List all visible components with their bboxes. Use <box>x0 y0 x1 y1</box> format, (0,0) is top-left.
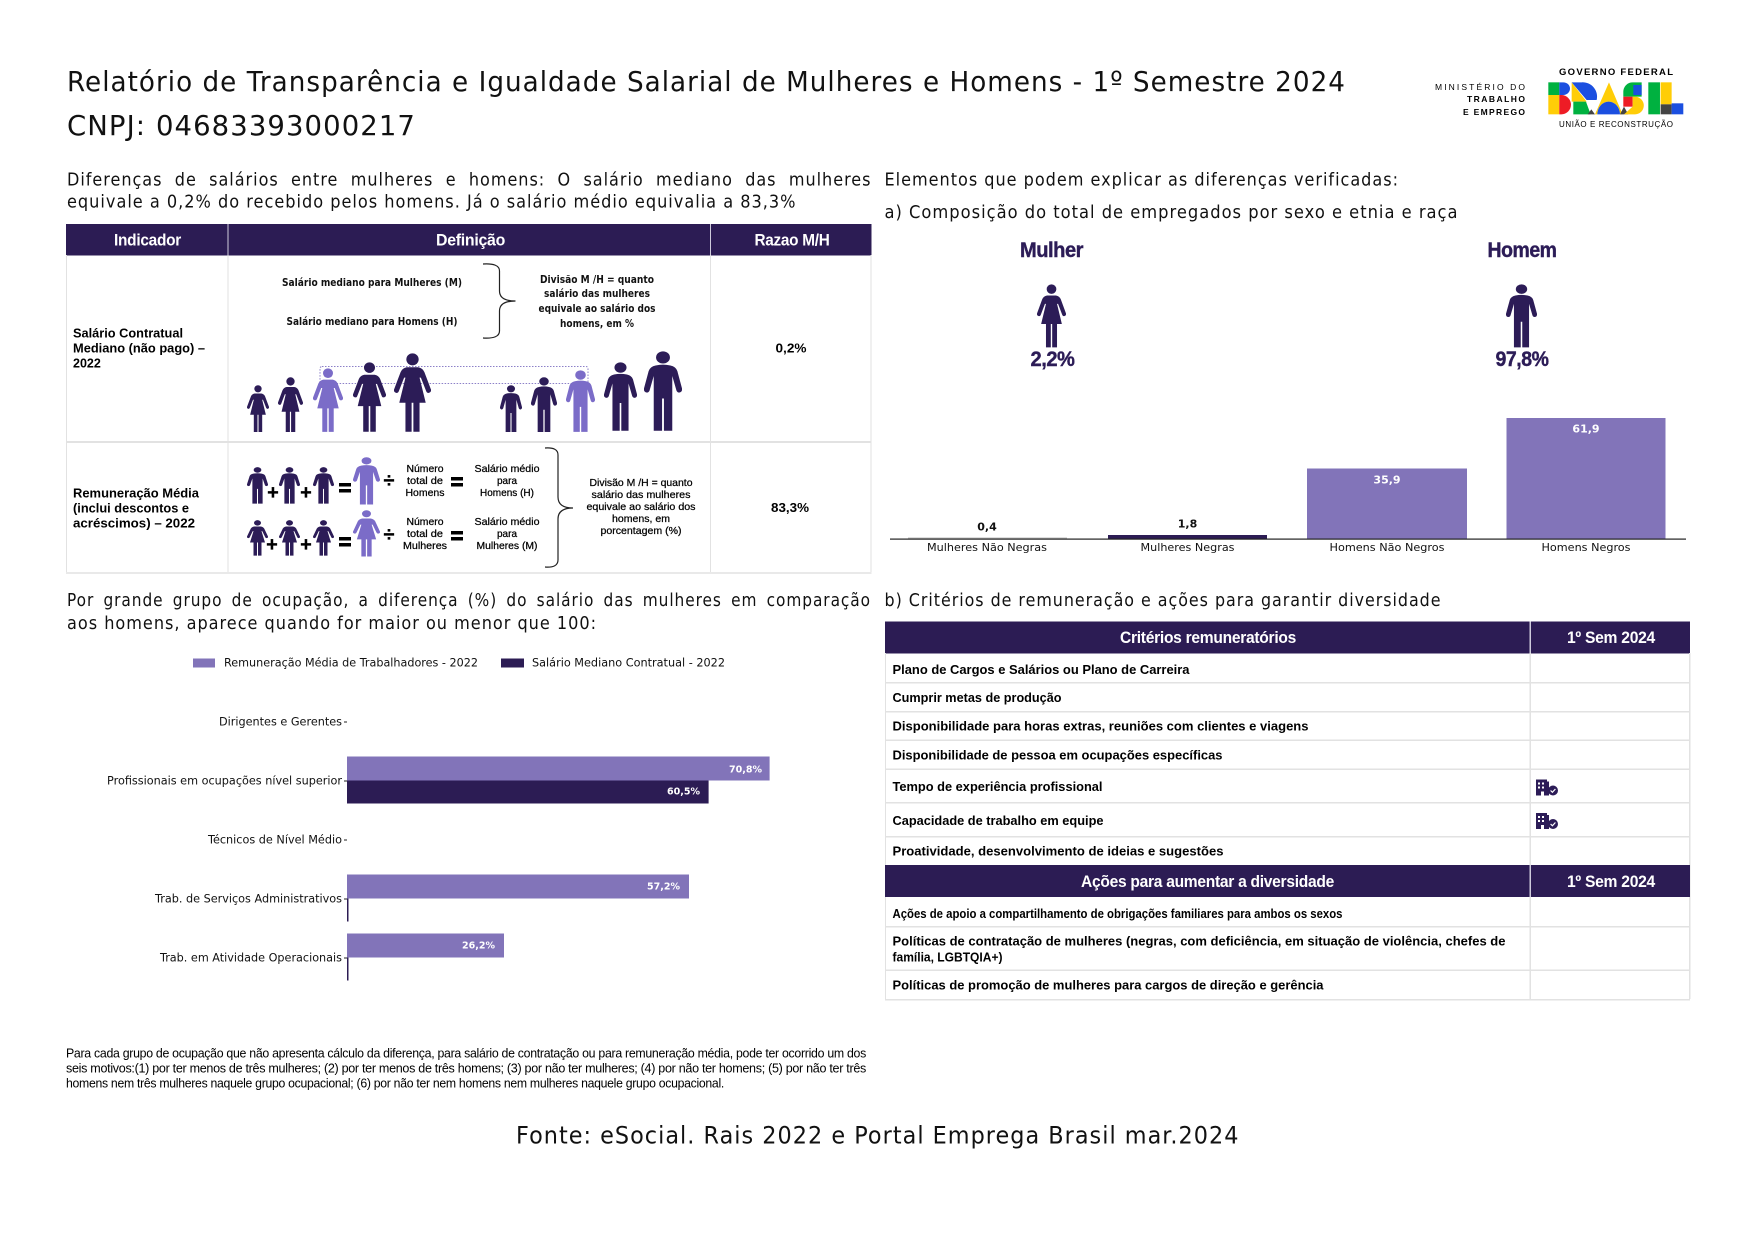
icon: empresa com verificação <box>1536 813 1558 829</box>
equation: homens: Salário médio <box>474 463 540 475</box>
source: Fonte: eSocial. Rais 2022 e Portal Emprega Brasil mar.2024 <box>516 1122 1240 1150</box>
equation: mulheres: total de <box>407 528 443 540</box>
axis labels: Mulheres Negras <box>1140 541 1235 554</box>
action rows: Ações de apoio a compartilhamento de obrigações familiares para ambos os sexos <box>892 907 1343 921</box>
row label: remuneração média <box>73 486 200 530</box>
header: ações para aumentar a diversidade: Ações para aumentar a diversidade <box>1081 872 1334 891</box>
legend <box>193 656 725 670</box>
equation: mulheres <box>247 510 540 557</box>
action rows: Políticas de contratação de mulheres (negras, com deficiência, em situação de violência, chefes de <box>892 934 1506 948</box>
bar: mulheres negras <box>1108 518 1267 539</box>
equation: mulheres: para <box>497 528 517 540</box>
median definition labels: Salário mediano para Mulheres (M) <box>282 277 462 289</box>
header: critérios remuneratórios <box>885 622 1690 654</box>
criteria rows: Capacidade de trabalho em equipe <box>892 814 1104 828</box>
header: critérios remuneratórios: 1º Sem 2024 <box>1567 628 1656 647</box>
text: divisão M/H remuneração <box>586 477 696 537</box>
equation: mulheres: Número <box>406 516 444 528</box>
axis labels: Homens Negros <box>1542 541 1631 554</box>
row label: salário contratual mediano: Salário Contratual <box>73 327 183 341</box>
equation: homens: + <box>300 482 312 504</box>
criteria rows: Tempo de experiência profissional <box>892 780 1102 794</box>
table header: Razao M/H <box>754 230 830 250</box>
bar chart: diferença por ocupação <box>107 716 770 980</box>
text: grupo de ocupação: Por grande grupo de ocupação, a diferença (%) do salário das mulheres em comparação <box>67 590 871 611</box>
category labels <box>107 716 342 964</box>
criteria rows <box>892 663 1309 858</box>
row label: remuneração média: acréscimos) – 2022 <box>73 516 195 530</box>
axis labels <box>927 541 1631 554</box>
composition: mulher: Mulher <box>1020 239 1083 262</box>
value: 83,3%: 83,3% <box>771 501 809 515</box>
bars: profissionais: 70,8% <box>729 764 762 776</box>
footnote <box>66 1046 866 1090</box>
equation: mulheres: + <box>300 534 312 556</box>
median definition labels <box>282 277 462 328</box>
logo: ministério e governo federal: MINISTÉRIO DO <box>1435 82 1525 92</box>
action rows: Políticas de promoção de mulheres para cargos de direção e gerência <box>892 978 1325 992</box>
equation: homens: Número <box>406 463 444 475</box>
bar: mulheres não negras: 0,4 <box>977 520 997 534</box>
equation: mulheres: ÷ <box>384 524 395 546</box>
row label: salário contratual mediano: Mediano (não pago) – <box>73 342 205 356</box>
text: divisão M/H mediano: salário das mulheres <box>544 288 650 300</box>
equation: mulheres: + <box>266 534 278 556</box>
intro text: diferenças de salários: Diferenças de salários entre mulheres e homens: O salário mediano das mulheres <box>67 170 872 190</box>
equation: homens <box>247 457 540 505</box>
equation: mulheres: Mulheres (M) <box>476 540 538 552</box>
median definition labels: Salário mediano para Homens (H) <box>286 316 458 328</box>
table: indicadores salariais <box>66 224 872 574</box>
bar chart: composição por sexo e raça <box>890 418 1686 554</box>
text: divisão M/H mediano <box>538 274 656 330</box>
text: grupo de ocupação <box>67 590 871 634</box>
bar: homens negros: 61,9 <box>1572 422 1600 436</box>
heading: elementos que podem explicar <box>884 170 1458 223</box>
row label: remuneração média: Remuneração Média <box>73 486 200 500</box>
criteria rows: Disponibilidade de pessoa em ocupações específicas <box>892 748 1223 762</box>
heading: elementos que podem explicar: Elementos que podem explicar as diferenças verificadas: <box>884 170 1399 190</box>
logo: ministério e governo federal: TRABALHO <box>1467 94 1525 104</box>
equation: homens: + <box>267 482 279 504</box>
footnote: Para cada grupo de ocupação que não apresenta cálculo da diferença, para salário de contratação ou para remuneração média, pode ter ocorrido um dos <box>66 1046 866 1060</box>
title: CNPJ: 04683393000217 <box>67 109 416 142</box>
composition: mulher: 2,2% <box>1030 348 1075 371</box>
category labels: Técnicos de Nível Médio <box>207 834 342 846</box>
composition: mulher <box>1020 239 1083 371</box>
row label: salário contratual mediano <box>73 327 205 371</box>
heading: critérios de remuneração: b) Critérios de remuneração e ações para garantir diversidade <box>884 590 1442 611</box>
equation: homens: Homens <box>406 487 444 499</box>
bars: serviços administrativos: 57,2% <box>647 882 680 892</box>
composition: homem: 97,8% <box>1496 348 1549 371</box>
equation: homens: ÷ <box>384 470 395 492</box>
category labels: Dirigentes e Gerentes <box>219 716 342 728</box>
action rows: família, LGBTQIA+) <box>892 950 1002 964</box>
equation: mulheres: Salário médio <box>474 516 540 528</box>
bars: atividade operacional <box>347 934 504 980</box>
legend: Remuneração Média de Trabalhadores - 2022 <box>224 656 478 670</box>
dotted highlight box <box>320 366 588 384</box>
category labels: Trab. em Atividade Operacionais <box>159 952 342 964</box>
row label: salário contratual mediano: 2022 <box>73 357 101 371</box>
bar: homens não negros: 35,9 <box>1373 474 1401 486</box>
composition: homem <box>1488 239 1556 371</box>
axis labels: Mulheres Não Negras <box>927 541 1047 554</box>
bars: serviços administrativos <box>347 874 689 922</box>
bar: mulheres negras: 1,8 <box>1178 518 1197 530</box>
criteria rows: Disponibilidade para horas extras, reuniões com clientes e viagens <box>892 720 1309 734</box>
equation: mulheres: Mulheres <box>403 540 447 552</box>
text: divisão M/H mediano: homens, em % <box>560 318 634 330</box>
criteria rows: Cumprir metas de produção <box>892 691 1062 705</box>
legend: Salário Mediano Contratual - 2022 <box>532 656 725 670</box>
intro text: diferenças de salários: equivale a 0,2% do recebido pelos homens. Já o salário médio equivalia a 83,3% <box>67 192 796 212</box>
footnote: homens nem três mulheres naquele grupo ocupacional; (6) por não ter nem homens nem mulheres naquele grupo ocupacional. <box>66 1076 724 1090</box>
logo: ministério e governo federal: E EMPREGO <box>1463 107 1525 117</box>
logo: ministério e governo federal: UNIÃO E RECONSTRUÇÃO <box>1559 120 1673 129</box>
text: divisão M/H remuneração: homens, em <box>612 513 670 525</box>
title <box>67 65 1346 142</box>
bars: profissionais <box>347 756 770 804</box>
equation: homens: Homens (H) <box>480 487 534 499</box>
criteria rows: Plano de Cargos e Salários ou Plano de Carreira <box>892 663 1191 677</box>
text: divisão M/H remuneração: equivale ao salário dos <box>586 501 696 513</box>
text: divisão M/H mediano: Divisão M /H = quanto <box>540 274 654 286</box>
equation: homens: para <box>497 475 517 487</box>
heading: elementos que podem explicar: a) Composição do total de empregados por sexo e etnia e raça <box>884 202 1458 223</box>
header: critérios remuneratórios: Critérios remuneratórios <box>1120 628 1296 647</box>
logo: ministério e governo federal: GOVERNO FEDERAL <box>1559 67 1673 78</box>
logo: ministério e governo federal <box>1435 67 1683 129</box>
axis labels: Homens Não Negros <box>1330 541 1445 554</box>
table header <box>66 224 872 256</box>
bar: homens negros <box>1506 418 1666 539</box>
table header: Definição <box>436 230 505 250</box>
row label: remuneração média: (inclui descontos e <box>73 502 189 516</box>
bars: atividade operacional: 26,2% <box>462 940 495 952</box>
text: divisão M/H remuneração: Divisão M /H = quanto <box>590 477 693 489</box>
table: critérios e ações <box>885 622 1690 1000</box>
value: 0,2%: 0,2% <box>776 342 806 356</box>
criteria rows: Proatividade, desenvolvimento de ideias e sugestões <box>892 844 1224 858</box>
category labels: Trab. de Serviços Administrativos <box>154 892 342 906</box>
icon: empresa com verificação <box>1536 780 1558 796</box>
icons: mulheres ordenadas <box>247 353 431 432</box>
icons: homens ordenados <box>500 351 682 432</box>
equation: homens: total de <box>407 475 443 487</box>
composition: homem: Homem <box>1488 239 1556 262</box>
header: ações para aumentar a diversidade <box>885 865 1690 897</box>
text: grupo de ocupação: aos homens, aparece quando for maior ou menor que 100: <box>67 613 597 634</box>
bars: profissionais: 60,5% <box>667 786 700 798</box>
text: divisão M/H remuneração: salário das mulheres <box>592 489 690 501</box>
text: divisão M/H remuneração: porcentagem (%) <box>600 525 682 537</box>
bar: homens não negros <box>1307 468 1467 539</box>
action rows <box>892 907 1506 992</box>
brace: mediano <box>483 264 516 338</box>
text: divisão M/H mediano: equivale ao salário dos <box>538 303 656 315</box>
intro text: diferenças de salários <box>67 170 872 212</box>
brace: remuneração <box>545 448 573 567</box>
header: ações para aumentar a diversidade: 1º Sem 2024 <box>1567 872 1656 891</box>
category labels: Profissionais em ocupações nível superior <box>107 774 342 788</box>
table header: Indicador <box>114 230 182 250</box>
footnote: seis motivos:(1) por ter menos de três mulheres; (2) por ter menos de três homens; (3) por não ter mulheres; (4) por não ter homens; (5) por não ter três <box>66 1062 866 1076</box>
title: Relatório de Transparência e Igualdade Salarial de Mulheres e Homens - 1º Semestre 2024 <box>67 65 1346 98</box>
